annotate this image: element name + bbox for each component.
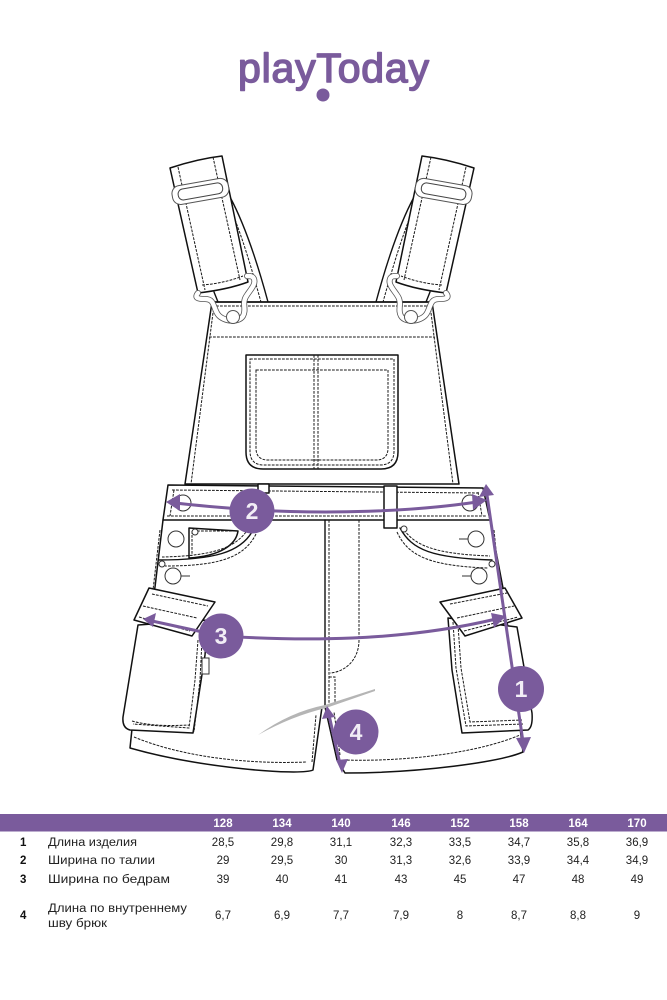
row 1 — [20, 837, 648, 849]
row 3: 45 — [454, 874, 466, 886]
table header: 134 — [272, 818, 292, 830]
row 4: 8,7 — [511, 910, 527, 922]
row 4: 8,8 — [570, 910, 586, 922]
right front pocket — [397, 526, 495, 568]
row 3: 39 — [217, 874, 229, 886]
row 4: Длина по внутреннему — [48, 903, 187, 915]
arrow 4 — [322, 706, 378, 773]
row 2: 29 — [217, 855, 229, 867]
left strap — [170, 156, 268, 302]
right cargo pocket — [440, 588, 532, 733]
row 2: 34,4 — [567, 855, 590, 867]
row 4: 7,7 — [333, 910, 349, 922]
table header: 146 — [391, 818, 411, 830]
row 1: 32,3 — [390, 837, 412, 849]
overalls line drawing — [123, 156, 532, 773]
row 1: 1 — [20, 837, 27, 849]
row 3: 43 — [395, 874, 407, 886]
row 4: 8 — [457, 910, 463, 922]
right buckle — [390, 276, 448, 324]
row 1: 28,5 — [212, 837, 234, 849]
row 2: 33,9 — [508, 855, 530, 867]
arrow 2 — [166, 488, 487, 534]
left front pocket — [158, 528, 256, 567]
buttons — [165, 495, 487, 584]
arrow 3 — [143, 613, 506, 658]
row 2: 30 — [335, 855, 347, 867]
arrow 4: 4 — [350, 719, 363, 745]
table header: 140 — [331, 818, 351, 830]
row 1: Длина изделия — [48, 837, 137, 849]
row 2: 2 — [20, 855, 26, 867]
row 3: 49 — [631, 874, 643, 886]
table header: 128 — [213, 818, 233, 830]
arrow 3: 3 — [215, 623, 227, 649]
row 3: 3 — [20, 874, 26, 886]
belt loops — [258, 484, 397, 528]
row 1: 33,5 — [449, 837, 471, 849]
row 3: 40 — [276, 874, 288, 886]
shorts body — [130, 485, 523, 773]
row 1: 34,7 — [508, 837, 530, 849]
table header — [0, 814, 667, 832]
row 3: 41 — [335, 874, 347, 886]
row 4: 6,9 — [274, 910, 290, 922]
row 3: 47 — [513, 874, 525, 886]
bib — [185, 302, 459, 484]
left cargo pocket — [123, 588, 215, 733]
row 4: 4 — [20, 910, 27, 922]
row 3 — [20, 874, 643, 886]
arrow 1: 1 — [515, 676, 528, 702]
row 2: 31,3 — [390, 855, 412, 867]
row 1: 36,9 — [626, 837, 648, 849]
row 2 — [20, 855, 648, 867]
row 4: 6,7 — [215, 910, 231, 922]
row 1: 35,8 — [567, 837, 589, 849]
row 4 — [20, 903, 640, 930]
logo: playToday — [238, 45, 430, 91]
table header: 152 — [450, 818, 470, 830]
row 2: 34,9 — [626, 855, 648, 867]
row 4: 9 — [634, 910, 640, 922]
fold shadow — [258, 689, 375, 735]
row 2: 29,5 — [271, 855, 293, 867]
table header: 164 — [568, 818, 588, 830]
table header: 158 — [509, 818, 529, 830]
table header: 170 — [627, 818, 647, 830]
left buckle — [196, 276, 254, 324]
arrow 2: 2 — [246, 498, 258, 524]
arrow 1 — [479, 484, 544, 753]
right strap — [376, 156, 474, 302]
bib pocket — [246, 355, 398, 469]
size table — [0, 814, 667, 930]
row 1: 29,8 — [271, 837, 293, 849]
row 3: 48 — [572, 874, 584, 886]
row 2: 32,6 — [449, 855, 471, 867]
row 3: Ширина по бедрам — [48, 874, 170, 886]
row 2: Ширина по талии — [48, 855, 155, 867]
row 4: шву брюк — [48, 918, 108, 930]
row 1: 31,1 — [330, 837, 352, 849]
row 4: 7,9 — [393, 910, 409, 922]
